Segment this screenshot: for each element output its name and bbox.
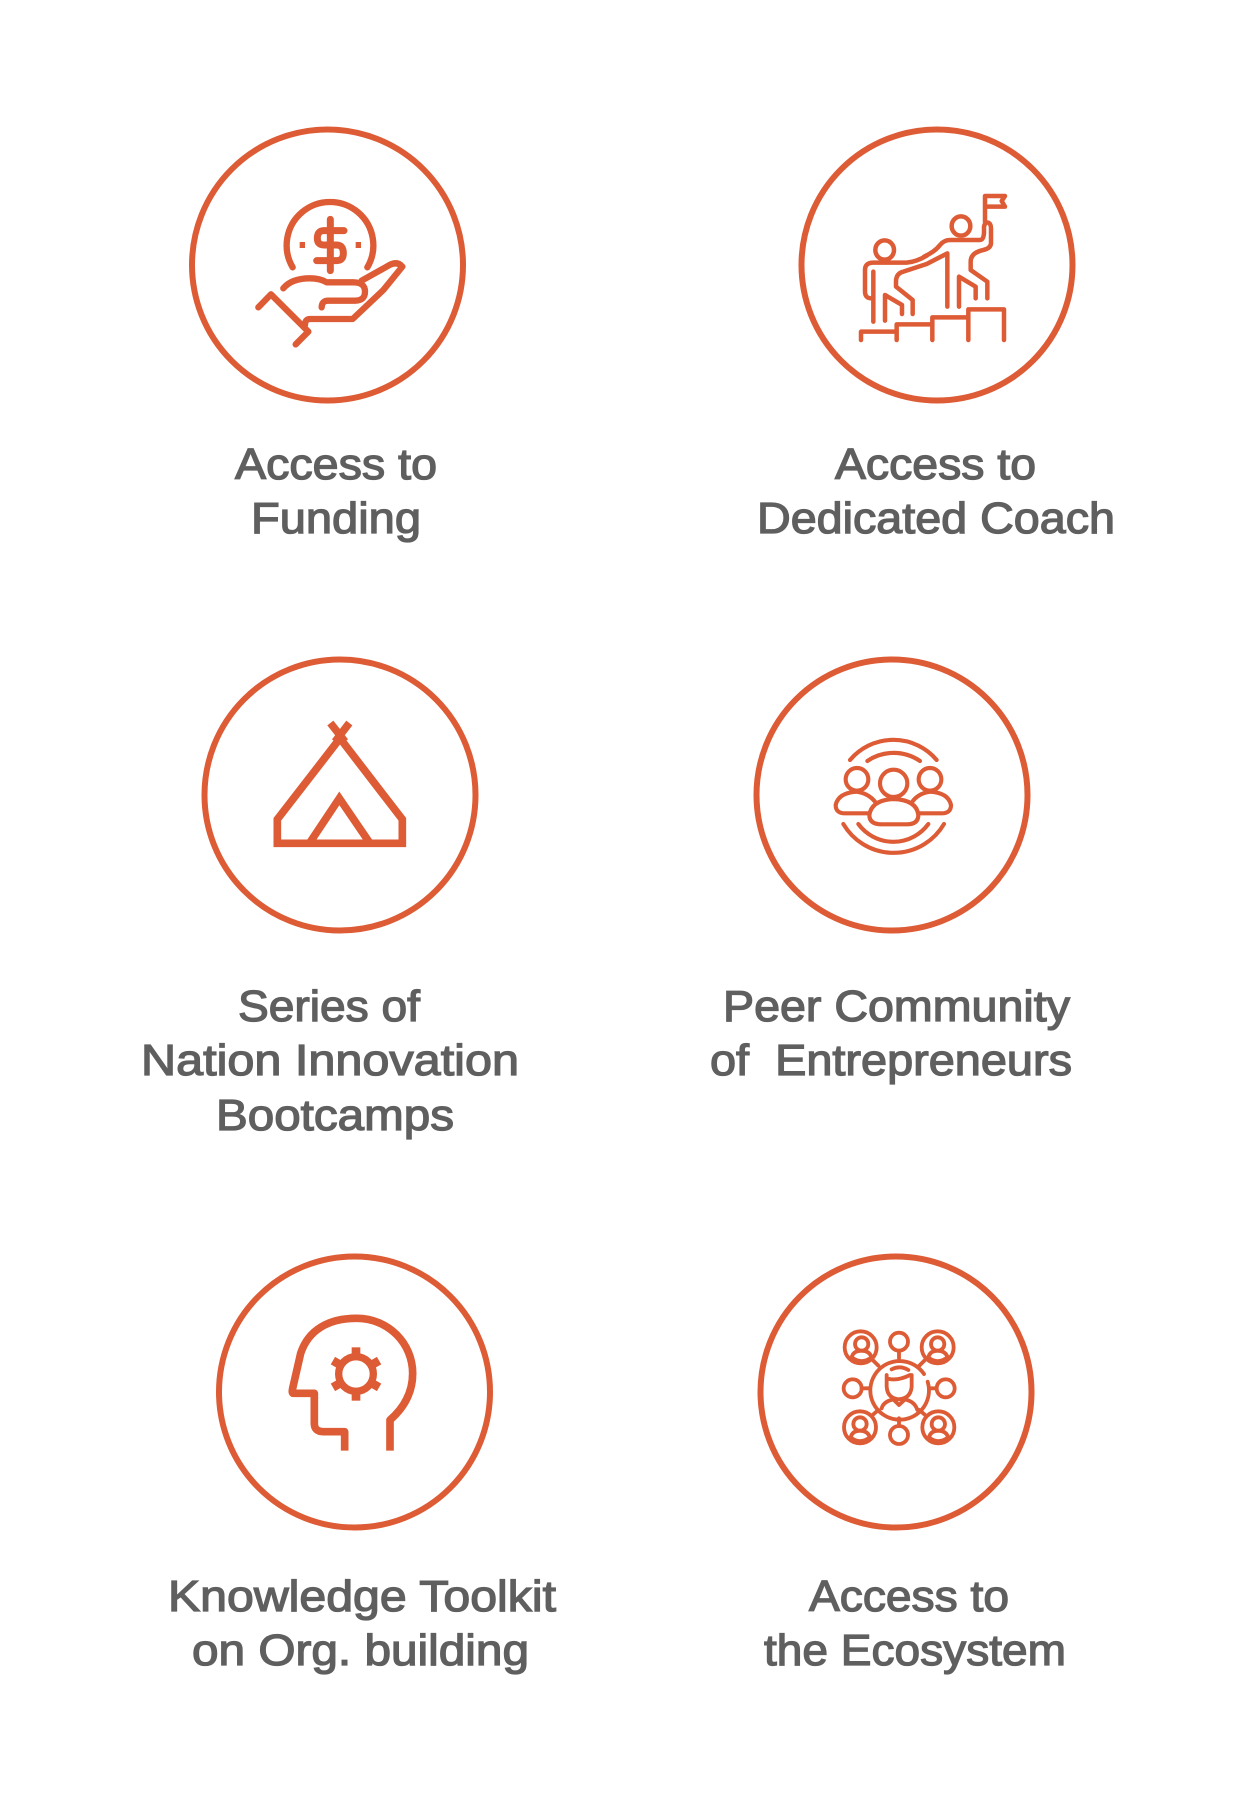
panel: knowledge toolkit xyxy=(168,1256,556,1675)
label: access to funding xyxy=(235,440,437,543)
icon circle: bootcamps xyxy=(204,660,476,930)
label: access to funding: Funding xyxy=(251,494,421,543)
label: series of nation innovation bootcamps: Bootcamps xyxy=(216,1091,454,1140)
icon: person network xyxy=(844,1331,955,1444)
icon: tent xyxy=(277,723,402,843)
label: access to dedicated coach xyxy=(757,440,1115,543)
label: access to the ecosystem xyxy=(764,1572,1066,1675)
label: series of nation innovation bootcamps: Series of xyxy=(238,982,421,1031)
label: access to funding: Access to xyxy=(235,440,437,489)
label: access to dedicated coach: Access to xyxy=(835,440,1036,489)
label: access to dedicated coach: Dedicated Coach xyxy=(757,494,1115,543)
label: knowledge toolkit on org. building xyxy=(168,1572,556,1675)
icon: hand holding dollar coin xyxy=(258,202,402,344)
label: peer community of entrepreneurs xyxy=(710,982,1072,1085)
label: peer community of entrepreneurs: Peer Community xyxy=(723,982,1070,1031)
icon circle: toolkit xyxy=(219,1256,490,1528)
panel: access to dedicated coach xyxy=(757,130,1115,543)
panel: peer community of entrepreneurs xyxy=(710,660,1072,1085)
icon: head with gear xyxy=(292,1318,413,1451)
icon: two people climbing steps to a flag xyxy=(861,196,1005,340)
icon circle: funding xyxy=(192,130,463,400)
panel: nation innovation bootcamps xyxy=(141,660,519,1140)
label: peer community of entrepreneurs: of Entrepreneurs xyxy=(710,1036,1072,1085)
label: knowledge toolkit on org. building: Knowledge Toolkit xyxy=(168,1572,556,1621)
label: series of nation innovation bootcamps xyxy=(141,982,519,1140)
label: access to the ecosystem: Access to xyxy=(809,1572,1009,1621)
icon circle: community xyxy=(756,660,1028,930)
label: access to the ecosystem: the Ecosystem xyxy=(764,1626,1066,1675)
icon circle: ecosystem xyxy=(760,1256,1032,1528)
label: series of nation innovation bootcamps: Nation Innovation xyxy=(141,1036,519,1085)
panel: access to funding xyxy=(192,130,463,543)
icon circle: coach xyxy=(802,130,1072,400)
label: knowledge toolkit on org. building: on Org. building xyxy=(192,1626,529,1675)
icon: three people surrounded by arcs xyxy=(836,740,951,853)
panel: access to the ecosystem xyxy=(760,1256,1066,1675)
